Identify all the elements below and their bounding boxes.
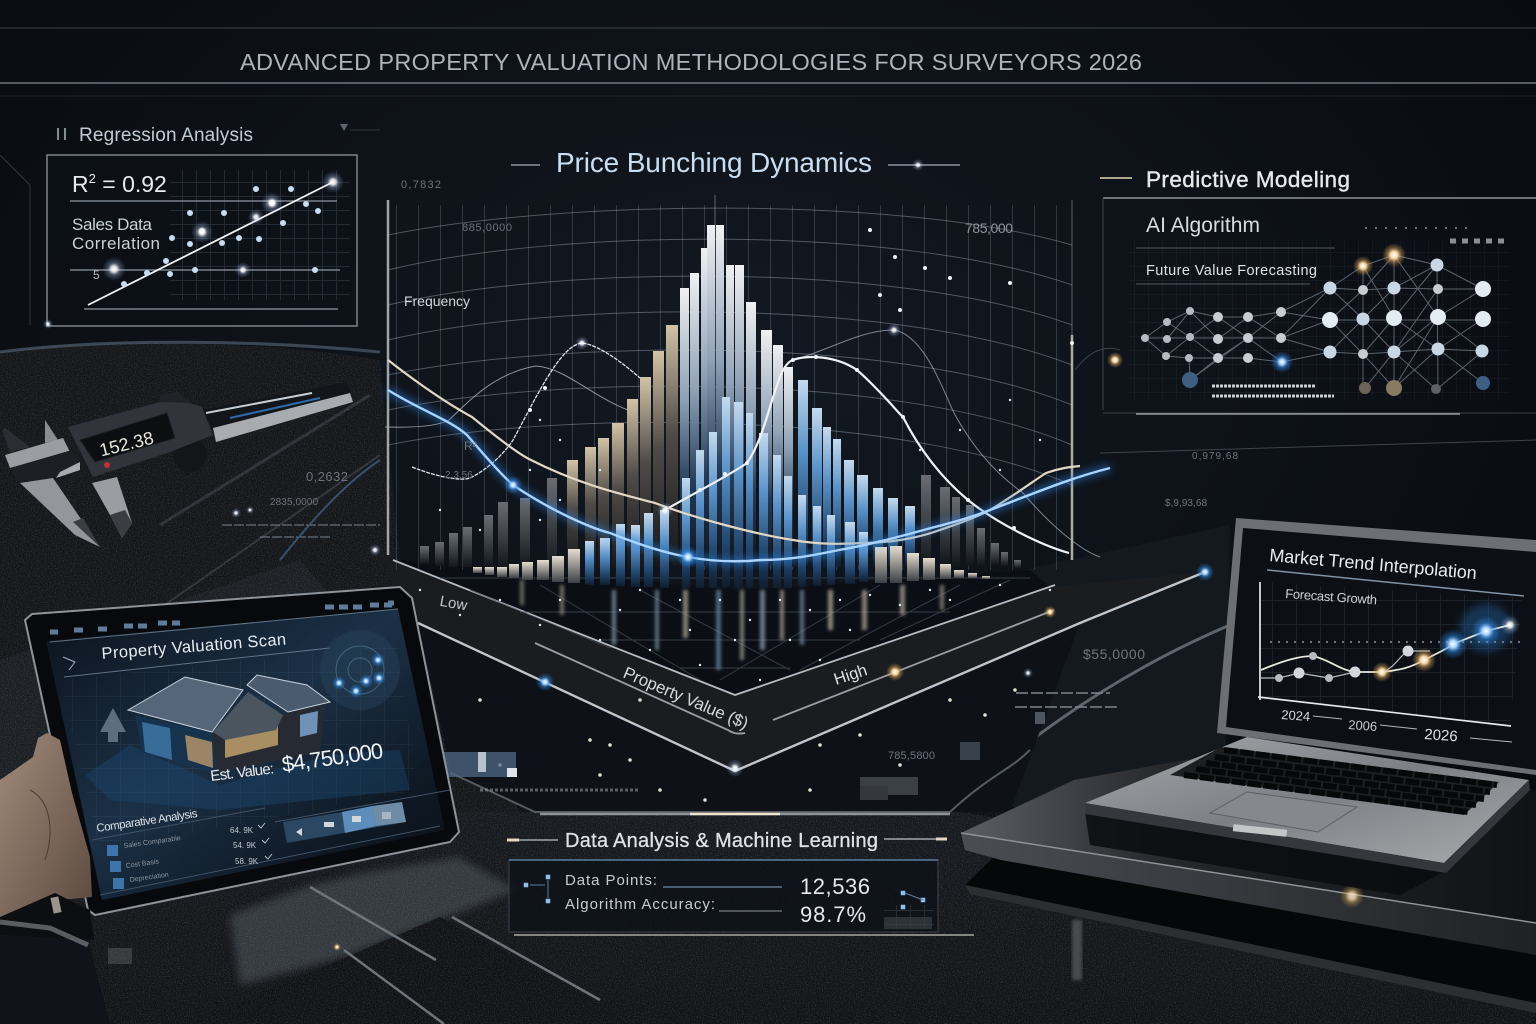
label: ai algorithm: AI Algorithm xyxy=(1146,214,1260,237)
floor grid and reflections xyxy=(440,578,1056,800)
axis label: property value: Property Value ($) xyxy=(620,663,751,733)
tablet screen xyxy=(46,609,445,900)
x axis years: 2026 xyxy=(1424,726,1458,745)
neural network xyxy=(1107,228,1510,396)
faint left values: 2835,0000 xyxy=(270,497,318,508)
data points row xyxy=(565,872,870,899)
label: forecast growth: Forecast Growth xyxy=(1285,586,1378,607)
title: ADVANCED PROPERTY VALUATION METHODOLOGIES FOR SURVEYORS 2026 xyxy=(240,49,1142,75)
faint chart values xyxy=(401,179,1013,481)
comparative analysis table: Comparative Analysis xyxy=(96,808,199,835)
faint chart values: 0,7832 xyxy=(401,179,441,191)
bar chart: price bunching xyxy=(385,179,1110,680)
curve: blue glow xyxy=(388,390,1110,561)
touchpad xyxy=(1210,792,1357,832)
sales data correlation label: Sales Data xyxy=(72,215,153,234)
panel: data analysis and machine learning xyxy=(507,830,974,935)
data points row: Data Points: xyxy=(565,872,657,889)
screen chart xyxy=(1258,570,1524,726)
curve: tan trend xyxy=(388,360,1080,544)
heading: property valuation scan: Property Valuation Scan xyxy=(101,631,287,663)
laptop lid xyxy=(1217,518,1536,775)
faint chart values: 885,0000 xyxy=(462,222,512,234)
curve: thin hills xyxy=(385,366,628,427)
panel: floor plane xyxy=(369,544,1214,814)
chart grid xyxy=(388,195,1072,580)
comparative analysis table: 64. 9K xyxy=(230,826,254,835)
faint chart values: R² xyxy=(464,439,477,453)
axis label: frequency: Frequency xyxy=(404,293,470,309)
r squared: = 0.92 xyxy=(96,171,167,197)
arrow icon xyxy=(100,708,126,742)
icon: digital caliper xyxy=(2,382,353,547)
nodes and sparkles xyxy=(420,230,1072,680)
house xyxy=(85,675,410,810)
faint chart values: 2,3,56 xyxy=(445,470,473,481)
comparative analysis table: Depreciation xyxy=(129,872,169,884)
comparative analysis table: Sales Comparable xyxy=(123,835,181,850)
faint right values: $,9,93,68 xyxy=(1165,498,1207,509)
panel: regression analysis: Correlation xyxy=(72,234,160,253)
est value xyxy=(209,738,385,785)
front bars xyxy=(473,397,990,588)
caliper body xyxy=(173,438,207,472)
faint right values: 0,979,68 xyxy=(1192,451,1238,462)
icon: tablet with hand xyxy=(0,587,459,1024)
est value: $4,750,000 xyxy=(280,738,385,777)
heading: regression analysis: Regression Analysis xyxy=(79,125,253,146)
curve: left white rise xyxy=(412,343,640,479)
faint right values: $55,0000 xyxy=(1083,646,1145,662)
laptop deck xyxy=(1085,737,1529,863)
back bars xyxy=(420,225,1021,572)
icon: laptop xyxy=(1085,518,1536,873)
comparative analysis table: 54. 9K xyxy=(233,841,257,850)
est value: Est. Value: xyxy=(209,760,275,785)
heading: predictive modeling: Predictive Modeling xyxy=(1146,167,1350,192)
comparative analysis table: 58. 9K xyxy=(235,857,259,866)
hand xyxy=(0,733,110,1024)
algorithm accuracy row: 98.7% xyxy=(800,902,866,927)
x axis years: 2024 xyxy=(1281,707,1311,724)
panel: regression analysis: 5 xyxy=(93,268,100,282)
curve: bright white xyxy=(665,357,1069,553)
label: future value forecasting: Future Value Forecasting xyxy=(1146,263,1317,279)
r squared: 2 xyxy=(89,171,96,186)
control buttons xyxy=(283,802,406,843)
r squared: R xyxy=(72,171,89,197)
caliper beam xyxy=(203,382,352,432)
heading: market trend interpolation: Market Trend Interpolation xyxy=(1269,545,1478,583)
heading: price bunching dynamics: Price Bunching Dynamics xyxy=(556,147,872,178)
axis label: high: High xyxy=(832,661,870,689)
comparative analysis table xyxy=(92,790,450,895)
faint right values xyxy=(888,348,1536,762)
panel: regression analysis xyxy=(0,124,380,329)
comparative analysis table: Cost Basis xyxy=(125,858,160,870)
axis label: low: Low xyxy=(438,593,469,614)
tablet frame xyxy=(25,587,459,915)
faint left values xyxy=(222,460,380,560)
x axis years: 2006 xyxy=(1348,717,1378,734)
desk xyxy=(961,750,1536,1013)
faint left values: 0,2632 xyxy=(306,469,348,484)
jaws xyxy=(2,428,30,452)
faint right values: 785,5800 xyxy=(888,750,935,762)
keyboard xyxy=(1170,747,1499,815)
algorithm accuracy row: Algorithm Accuracy: xyxy=(565,896,715,913)
data points row: 12,536 xyxy=(800,874,870,899)
panel: predictive modeling xyxy=(1100,167,1536,414)
curve: thin right xyxy=(793,330,1100,557)
heading: data analysis: Data Analysis & Machine Learning xyxy=(565,830,878,852)
algorithm accuracy row xyxy=(565,896,866,927)
caliper readout: 152.38 xyxy=(97,428,156,460)
faint chart values: 785,000 xyxy=(965,220,1013,236)
x axis years xyxy=(1281,707,1512,745)
scan radar xyxy=(320,630,400,710)
